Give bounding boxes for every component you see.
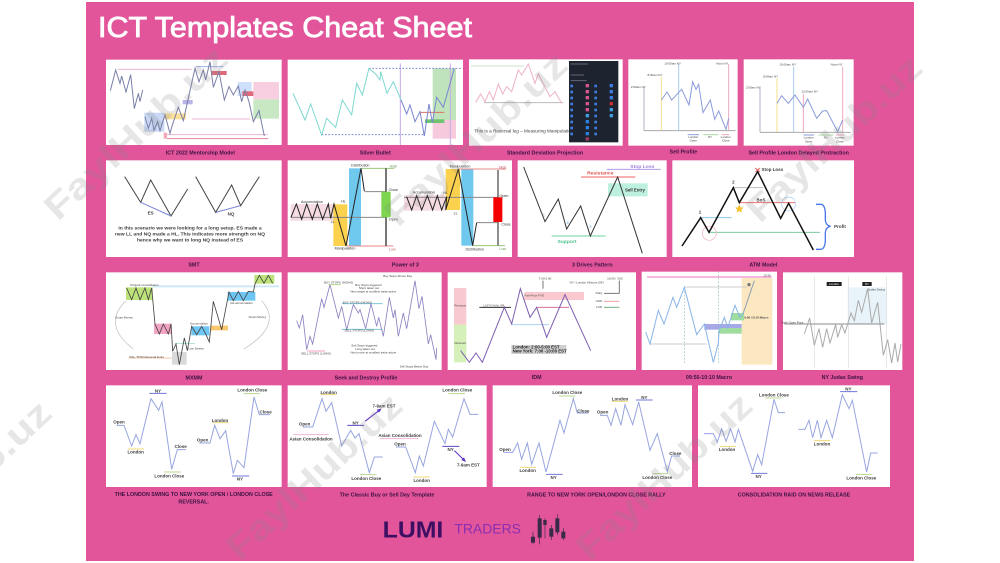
panel: IDM: Discount [455,341,466,345]
panel: Power of 3: Low [499,247,506,251]
panel: Sell Profile: 8:00am NY [648,73,662,77]
panel: Sell Profile: NY [708,135,712,139]
panel: Consolidation Raid on News Release: London Close [846,475,877,480]
panel: Power of 3: Open [389,218,398,222]
row 2 right: 3 Drives and ATM [518,160,854,268]
panel: Range to New York Open: Close [577,408,590,413]
panel: The London Swing to New York Open: NY [237,476,243,481]
caption: Seek and Destroy Profile: Seek and Destroy Profile [335,375,397,381]
panel: Seek and Destroy Profile: BUY STOPS (HIGHS) [324,280,353,284]
panel: 3 Drives Pattern: Support [557,239,577,245]
panel: Power of 3: Accumulation [413,190,435,194]
panel: Power of 3: Accumulation [301,200,323,204]
panel: Sell Profile London Delayed Protraction: Close [836,139,844,143]
panel: Range to New York Open: NY [641,395,647,400]
panel: Sell Profile London Delayed Protraction: London [804,136,814,140]
panel: Power of 3: Distribution [351,164,369,168]
panel: Power of 3: Open [500,194,508,198]
panel: 3 Drives Pattern: 1 [543,213,546,218]
panel: IDM: NY / London Killzone (5F) [570,280,604,284]
panel: NY Judas Swing: Daily Open Price [781,320,804,324]
row 1 left: mentorship model and silver bullet [106,60,463,157]
panel: Sell Profile London Delayed Protraction: Open [805,139,813,143]
panel: MXMM: Smart Money [115,316,133,320]
panel: Sell Profile London Delayed Protraction: 12:00pm NY [801,90,818,94]
caption: Silver Bullet: Silver Bullet [360,151,391,157]
panel: Seek and Destroy Profile: SELL STOPS (LOWS) [344,329,374,333]
panel: Consolidation Raid on News Release [698,385,890,487]
panel: IDM: LO/YO Killz. IRL [483,303,506,307]
panel: MXMM: Original consolidation [130,283,159,287]
panel: IDM: Fair Price FVG [524,294,545,298]
panel: Range to New York Open: Close [669,451,682,456]
panel: IDM [448,272,636,370]
panel: The London Swing to New York Open: London [212,418,228,423]
watermarks: FaylHub.uz [737,46,930,230]
panel: Power of 3: High [499,165,506,169]
panel: Range to New York Open: NY [551,475,557,480]
caption: Power of 3: Power of 3 [392,262,419,268]
panel: The London Swing to New York Open: London [127,450,144,455]
panel: MXMM: Low Sweep [188,347,204,351]
row 3 right: IDM, Macro and Judas Swing [448,271,902,381]
panel: Consolidation Raid on News Release: London [814,442,830,447]
panel: Seek and Destroy Profile: BUY STOPS (HIGHS) [343,301,372,305]
caption: SMT: SMT [188,262,200,268]
caption: 09:50-10:10 Macro: 09:50-10:10 Macro [686,375,733,381]
panel: Seek and Destroy Profile: Next move at smallest trade active [351,350,396,354]
panel: MXMM: SSL / BTM Reversal Entry [129,355,165,359]
panel: The Classic Buy or Sell Day Template: NY [353,420,359,425]
panel: The Classic Buy or Sell Day Template [288,385,487,487]
panel: The Classic Buy or Sell Day Template: London Close [442,388,473,393]
panel: The London Swing to New York Open: NY [155,388,161,393]
panel: MXMM: Accumulation [190,322,208,326]
panel: SMT [106,160,282,257]
panel: ATM Model: 2 [732,180,735,185]
panel: Power of 3: High [390,164,397,168]
panel: 3 Drives Pattern [518,160,667,257]
panel: ATM Model: BoS [757,198,765,203]
panel: Power of 3: LL [454,212,458,216]
caption: Range to New York Open / London Close Rally: RANGE TO NEW YORK OPEN/LONDON CLOSE RALLY [527,492,666,498]
row 2 left: SMT and Power of 3 [106,160,512,268]
panel: Sell Profile London Delayed Protraction [744,59,854,146]
panel: Silver Bullet [288,60,463,145]
panel: Range to New York Open: London Close [642,475,673,480]
panel: Range to New York Open: London [519,468,536,473]
caption: Sell Profile London Delayed Protraction: Sell Profile London Delayed Protraction [748,150,849,156]
logo: Lumi Traders [383,514,565,544]
row 1 right: deviation projection and sell profiles [469,59,854,156]
panel: The Classic Buy or Sell Day Template: Asian Consolidation [378,433,422,438]
panel: IDM: Premium [454,303,467,307]
panel: IDM: 10:00 / 3:00 [607,277,623,281]
panel: Seek and Destroy Profile: Next target at smallest trade active [350,289,397,293]
panel: SMT: new LL and NQ made a HL. This indicates more strength on NQ [115,232,265,238]
panel: Seek and Destroy Profile: Buy Stops Above Day [383,274,413,278]
panel: NY Judas Swing: NY [865,282,869,286]
panel: Seek and Destroy Profile: Short taken out [359,286,379,290]
panel: MXMM: Smart Money [248,315,267,319]
panel: ATM Model: Stop Loss [761,167,784,172]
panel: Sell Profile London Delayed Protraction: NY [824,136,828,140]
panel: Consolidation Raid on News Release: NY [845,387,851,392]
panel: IDM: New York: 7:00 -10:00 EST [513,349,567,354]
panel: Standard Deviation Projection [469,59,623,146]
panel: Sell Profile London Delayed Protraction: 2:00am NY [746,86,761,90]
panel: Power of 3: Manipulation [450,164,470,168]
panel: Consolidation Raid on News Release: London [719,447,735,452]
panel: Sell Profile: 10:00am NY [664,61,681,65]
caption: MXMM: MXMM [186,375,203,381]
panel: SMT: NQ [228,212,235,217]
panel: 3 Drives Pattern: Stop Loss [630,164,655,170]
panel: Seek and Destroy Profile: Sell Stops triggered [351,344,378,348]
panel: Sell Profile: London [688,135,699,139]
panel: Sell Profile: 2:00am NY [631,85,646,89]
panel: The London Swing to New York Open: London Close [237,388,268,393]
panel: Seek and Destroy Profile [288,272,442,370]
row 3 left: MXMM and Seek and Destroy [106,272,442,381]
panel: ATM Model [672,160,854,257]
caption: Consolidation Raid on News Release: CONSOLIDATION RAID ON NEWS RELEASE [738,492,851,498]
panel: Range to New York Open [493,385,692,487]
panel: The Classic Buy or Sell Day Template: Asian Consolidation [289,437,333,442]
panel: SMT: In this scenario we were looking for a long setup. ES made a [118,226,262,232]
panel: The London Swing to New York Open [106,385,282,487]
panel: Seek and Destroy Profile: Sell Stops Below Day [400,364,429,368]
panel: Power of 3: HL [443,191,448,195]
watermarks: FaylHub.uz [35,38,235,228]
panel: Power of 3: Close [389,188,398,192]
panel: NY Judas Swing: London [829,282,839,286]
panel: Seek and Destroy Profile: Long taken out [355,347,375,351]
panel: Sell Profile London Delayed Protraction: 10:00am NY [779,63,796,67]
panel: IDM: Daily [596,291,603,295]
panel: MXMM [106,272,282,370]
panel: The London Swing to New York Open: Close [175,444,187,449]
row 4 right: range and consolidation raid [493,385,890,498]
panel: Power of 3: HL [341,199,346,203]
caption: ICT 2022 Mentorship Model: ICT 2022 Mentorship Model [166,151,235,157]
panel: Consolidation Raid on News Release: London Close [759,392,789,397]
panel: The Classic Buy or Sell Day Template: Open [394,441,406,446]
caption: The London Swing to New York Open / London Close Reversal: THE LONDON SWING TO NEW YORK OPEN / LONDON CLOSE [115,492,273,498]
caption: The Classic Buy or Sell Day Template: The Classic Buy or Sell Day Template [340,492,434,498]
panel: Power of 3: Manipulation [335,247,355,251]
watermarks: FaylHub.uz [375,44,575,234]
panel: The Classic Buy or Sell Day Template: 7-9am EST [373,404,396,409]
panel: The Classic Buy or Sell Day Template: London Close [351,476,382,481]
panel: Consolidation Raid on News Release: NY [756,474,762,479]
caption: 3 Drives Pattern: 3 Drives Pattern [572,262,613,268]
caption: NY Judas Swing: NY Judas Swing [822,375,863,381]
panel: NY Judas Swing [781,272,902,370]
panel: Range to New York Open: London [612,396,628,401]
panel: 3 Drives Pattern: 2 [566,220,569,225]
panel: The London Swing to New York Open: Open [113,420,125,425]
panel: The Classic Buy or Sell Day Template: 7-9am EST [457,462,480,467]
panel: Sell Profile London Delayed Protraction: Noon NY [831,63,843,67]
panel: Power of 3 [288,160,512,257]
panel: IDM: HOD [596,299,603,303]
panel: 3 Drives Pattern: Resistance [587,170,614,176]
caption: Sell Profile: Sell Profile [670,150,697,156]
caption: Standard Deviation Projection: Standard Deviation Projection [507,150,583,156]
panel: ATM Model: Profit [834,224,846,229]
panel: Seek and Destroy Profile: SELL STOPS (LOWS) [301,352,331,356]
panel: The Classic Buy or Sell Day Template: NY [448,447,454,452]
panel: NY Judas Swing: Judas Swing [868,287,885,291]
panel: Sell Profile London Delayed Protraction: London [835,136,845,140]
panel: Standard Deviation Projection: This is a Reversal leg – Measuring Manipulation. [474,129,575,134]
caption: IDM: IDM [532,375,542,381]
panel: Power of 3: LL [331,220,335,224]
panel: The Classic Buy or Sell Day Template: London [413,478,430,483]
row 4 left: London swing and classic template [106,385,487,506]
panel: Power of 3: Close [501,222,511,226]
logo wordmark: TRADERS: TRADERS [454,520,521,536]
panel: ATM Model: 1 [699,210,702,215]
caption: ATM Model: ATM Model [749,262,778,268]
panel: 3 Drives Pattern: 3 [589,224,592,229]
logo wordmark: LUMI: LUMI [383,517,443,543]
panel: Range to New York Open: London Close [552,390,583,395]
panel: IDM: London: 2:00-5:00 EST [513,345,560,350]
caption: The London Swing to New York Open / London Close Reversal [115,492,273,506]
panel: Range to New York Open: Open [499,447,511,452]
panel: The Classic Buy or Sell Day Template: London [320,390,337,395]
panel: Seek and Destroy Profile: Buy Stops triggered [355,283,382,287]
panel: Sell Profile: Close [722,139,730,143]
panel: Power of 3: Low [389,247,396,251]
panel: Sell Profile [628,59,738,146]
panel: 09:50-10:10 Macro: 10:30 [763,274,771,278]
title: ICT Templates Cheat Sheet [98,12,472,44]
panel: Sell Profile London Delayed Protraction: 8:00am NY [763,74,778,78]
panel: ICT 2022 Mentorship Model [106,60,282,145]
panel: 09:50-10:10 Macro: 9:50-10:10 Macro [744,316,769,320]
panel: SMT: hence why we want to long NQ instead of ES [137,238,244,244]
panel: Sell Profile: Noon NY [716,62,728,66]
panel: 3 Drives Pattern: Sell Entry [625,187,646,192]
panel: Range to New York Open: Open [597,409,609,414]
panel: Sell Profile: Open [690,139,697,143]
panel: IDM: LOD [596,305,603,309]
panel: The London Swing to New York Open: London Close [154,473,185,478]
panel: Power of 3: Distribution [466,248,484,252]
panel: SMT: ES [148,210,154,215]
panel: Sell Profile: London [721,135,731,139]
icon: candlesticks [531,514,565,544]
caption: The London Swing to New York Open / London Close Reversal: REVERSAL. [178,500,209,506]
panel: IDM: 7:00-2:00 [539,277,552,281]
panel: The London Swing to New York Open: Close [260,410,272,415]
panel: The London Swing to New York Open: Open [197,437,209,442]
panel: The Classic Buy or Sell Day Template: Open [299,421,311,426]
panel: MXMM: Re-accumulation [230,301,253,305]
panel: 09:50-10:10 Macro [642,271,777,370]
